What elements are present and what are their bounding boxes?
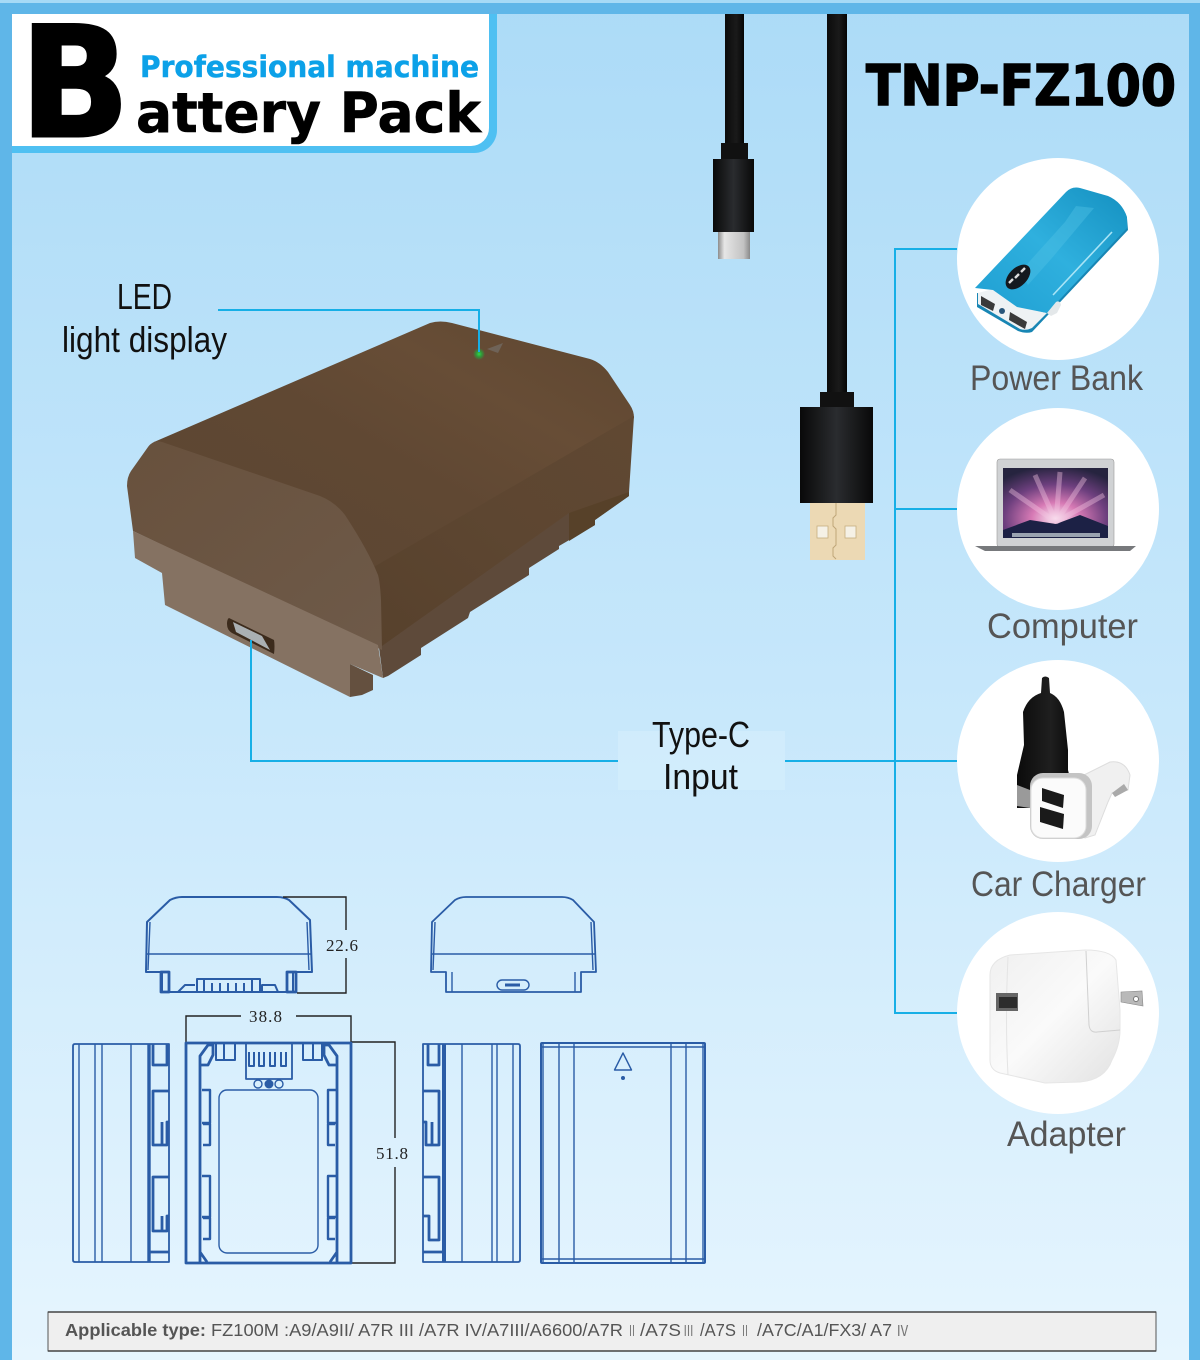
Type-C label: Input bbox=[663, 756, 738, 797]
subtitle: Professional machine bbox=[140, 50, 479, 84]
panel: power bank bbox=[957, 158, 1159, 398]
connector tree lines bbox=[785, 249, 957, 1013]
applicable type bar: /A7S bbox=[700, 1320, 736, 1340]
battery lower band bbox=[378, 490, 629, 678]
applicable type bar: Ⅱ bbox=[627, 1323, 637, 1340]
big letter B: B bbox=[20, 0, 130, 173]
dimension: 22.6 bbox=[283, 897, 358, 993]
label: car charger: Car Charger bbox=[971, 865, 1146, 904]
USB-A cable bbox=[800, 14, 873, 560]
title text: attery Pack bbox=[136, 81, 482, 145]
dimension: 51.8: 51.8 bbox=[376, 1144, 408, 1163]
LED indicator bbox=[218, 310, 485, 360]
icon: power bank bbox=[975, 188, 1128, 333]
applicable type bar: Ⅲ bbox=[683, 1323, 694, 1340]
label: computer: Computer bbox=[987, 607, 1138, 646]
applicable type bar: FZ100M :A9/A9II/ A7R III /A7R IV/A7III/A6600/A7R bbox=[211, 1320, 623, 1340]
panel: computer bbox=[957, 408, 1159, 646]
battery right lower section bbox=[569, 490, 629, 541]
LED label: LED bbox=[117, 276, 172, 317]
applicable type bar: Ⅳ bbox=[896, 1323, 909, 1340]
battery corner notch bbox=[350, 664, 373, 697]
type-c leader line bbox=[251, 640, 618, 761]
Type-C label: Type-C bbox=[652, 714, 750, 755]
icon: laptop bbox=[975, 459, 1136, 551]
dimension: 38.8: 38.8 bbox=[249, 1007, 282, 1026]
battery top face bbox=[154, 322, 634, 600]
technical drawing: right side view bbox=[423, 1044, 520, 1262]
USB-C cable bbox=[713, 14, 754, 259]
arrow mark bbox=[487, 343, 503, 353]
applicable type bar: Applicable type: bbox=[65, 1320, 206, 1340]
Type-C label bbox=[618, 714, 785, 797]
battery light band bbox=[133, 531, 383, 697]
technical drawing: terminal face bbox=[186, 1043, 351, 1263]
title banner bbox=[12, 0, 497, 173]
dimension: 22.6: 22.6 bbox=[326, 936, 358, 955]
technical drawing: back view bbox=[541, 1043, 705, 1263]
battery side face bbox=[372, 416, 634, 646]
dimension: 51.8 bbox=[351, 1042, 408, 1263]
model name: TNP-FZ100 bbox=[866, 54, 1176, 119]
panel: car charger bbox=[957, 660, 1159, 904]
LED label: light display bbox=[62, 319, 227, 360]
icon: car charger bbox=[1017, 676, 1130, 839]
label: adapter: Adapter bbox=[1007, 1115, 1126, 1154]
applicable type bar: Ⅱ bbox=[740, 1323, 750, 1340]
battery front face bbox=[127, 441, 382, 650]
panel: battery render bbox=[127, 322, 634, 697]
applicable type bar: /A7S bbox=[640, 1320, 681, 1340]
LED label bbox=[62, 276, 227, 360]
label: power bank: Power Bank bbox=[970, 359, 1143, 398]
usb-c port bbox=[227, 618, 274, 654]
technical drawing: left side view bbox=[73, 1044, 169, 1262]
dimension: 38.8 bbox=[186, 1007, 351, 1042]
panel: adapter bbox=[957, 912, 1159, 1154]
applicable type bar bbox=[48, 1312, 1156, 1351]
technical drawing: top view with connector bbox=[146, 897, 312, 992]
icon: adapter bbox=[990, 950, 1143, 1083]
technical drawing: end view with port bbox=[431, 897, 596, 992]
applicable type bar: /A7C/A1/FX3/ A7 bbox=[757, 1320, 892, 1340]
icon: triangle mark bbox=[614, 1053, 632, 1070]
